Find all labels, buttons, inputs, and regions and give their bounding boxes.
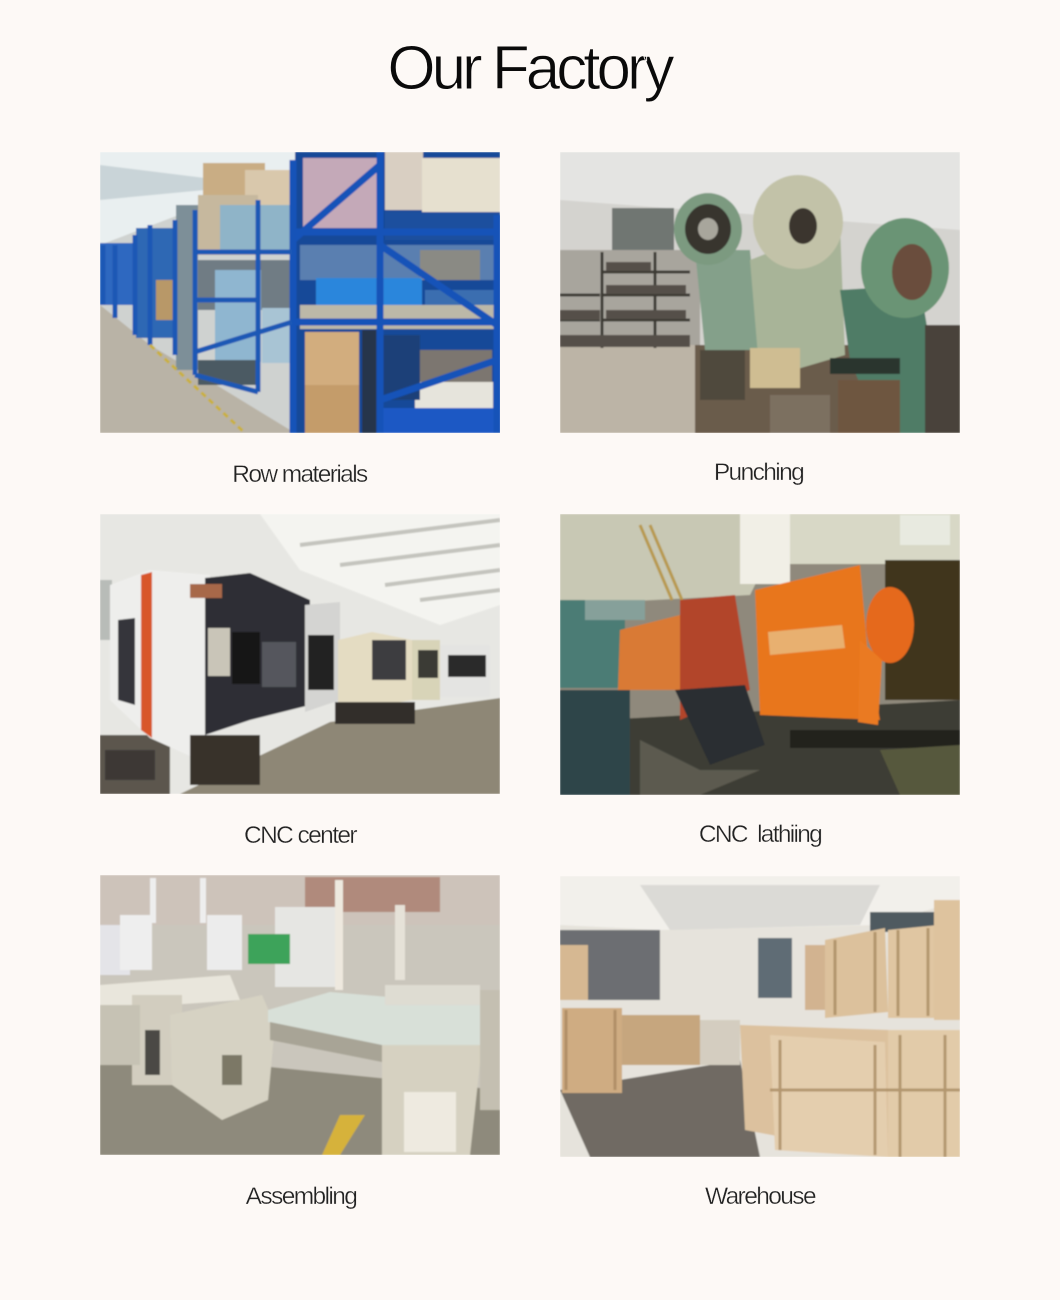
title: Our Factory [387,34,675,103]
label: Row materials: Row materials [232,461,368,488]
photo: CNC lathing [560,514,960,795]
photo: punching machines [560,152,960,433]
label: CNC lathing: CNC lathiing [699,821,822,848]
photo: CNC center [100,514,500,794]
label: CNC center: CNC center [244,822,357,849]
photo: raw materials shelves [100,152,500,433]
photo: assembling [100,875,500,1155]
photo: warehouse crates [560,876,960,1157]
label: Punching: Punching [714,459,804,486]
label: Assembling: Assembling [246,1183,357,1210]
label: Warehouse: Warehouse [705,1183,816,1210]
